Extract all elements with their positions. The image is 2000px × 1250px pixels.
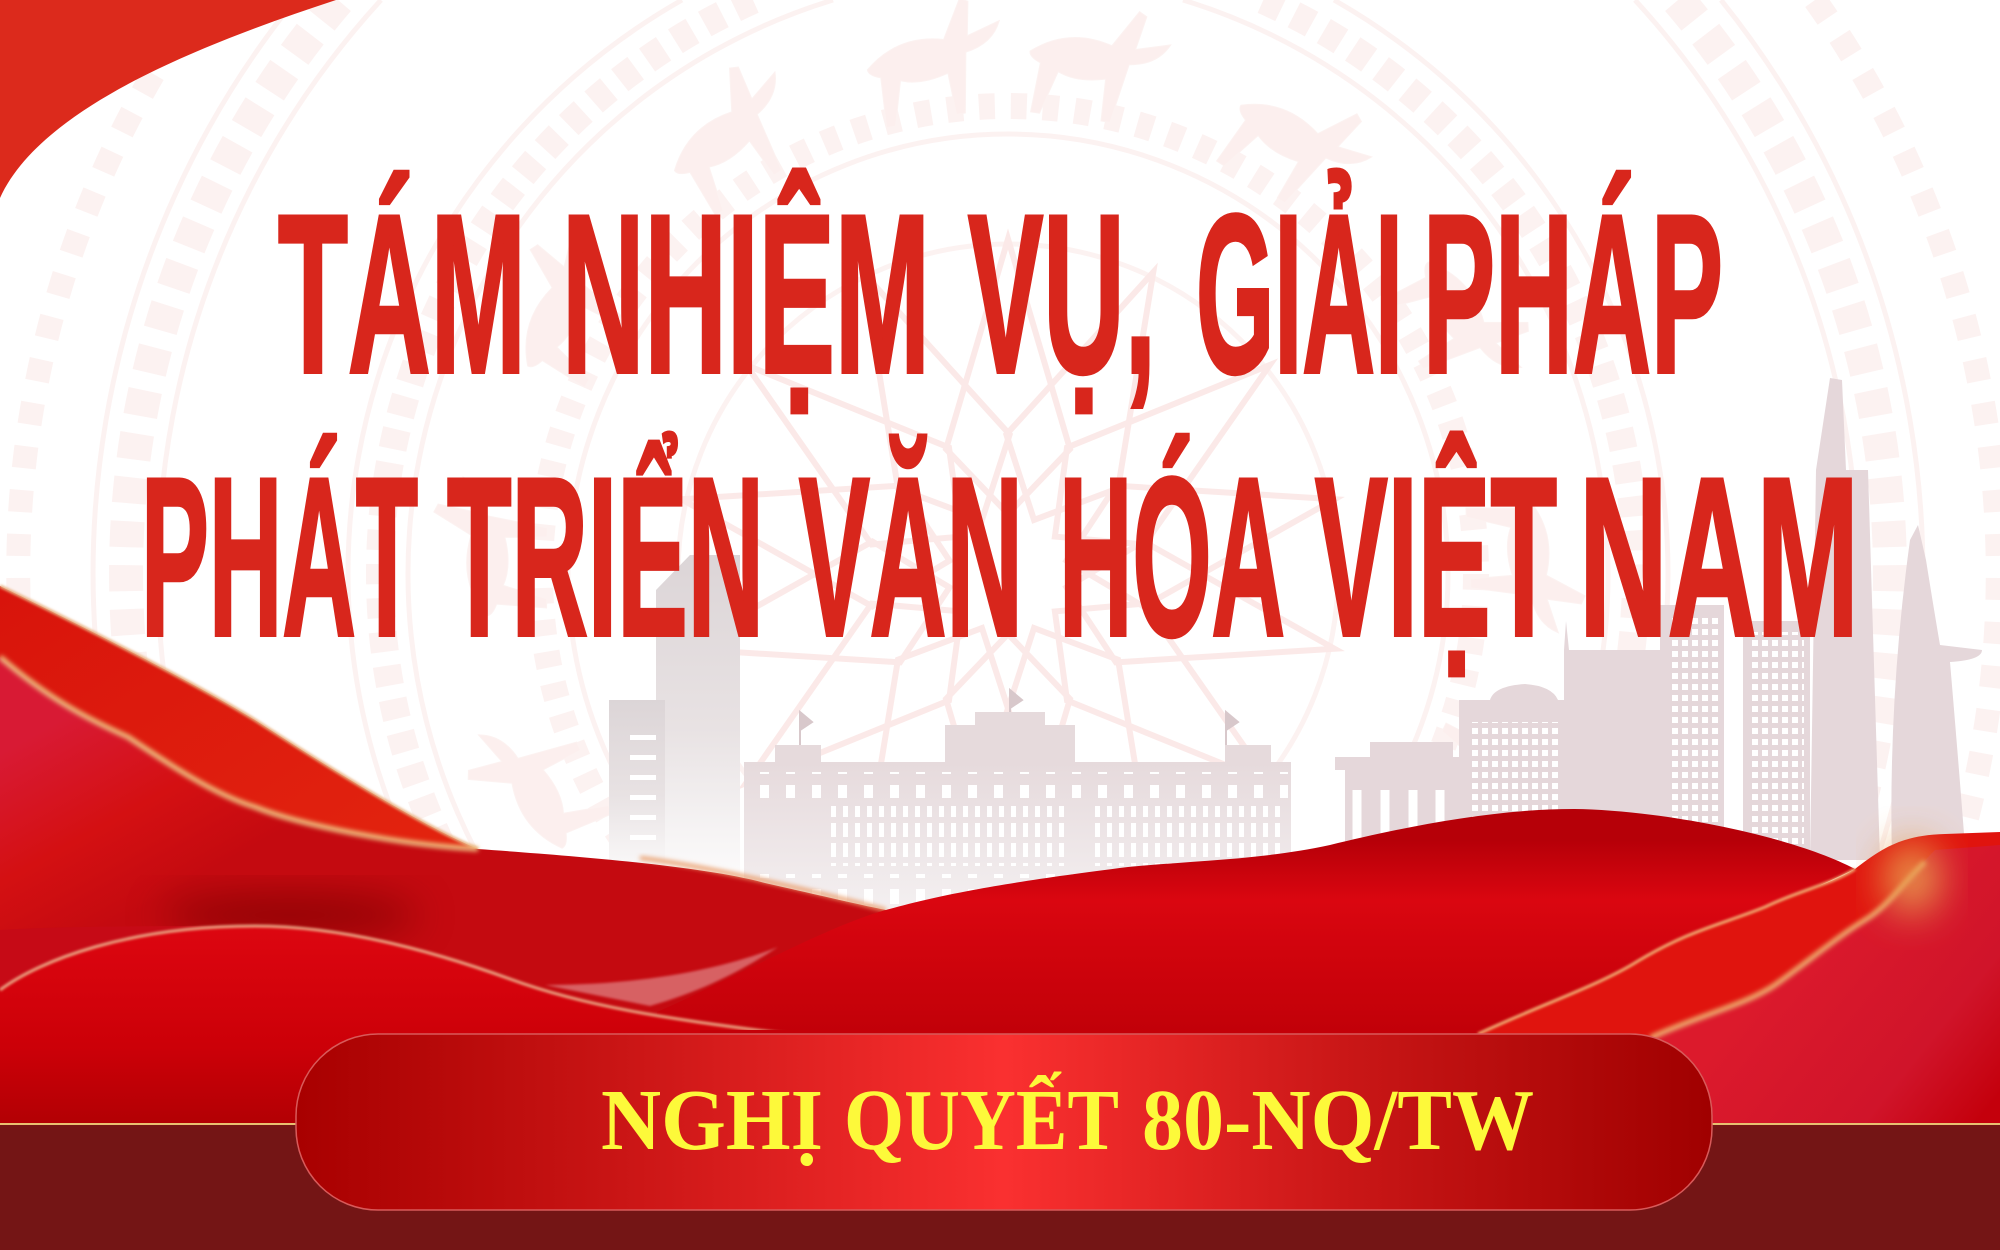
banner text	[601, 1071, 1534, 1168]
title: TÁM	[278, 167, 526, 420]
top-left red swoosh	[0, 0, 336, 198]
title: TRIỂN	[447, 430, 764, 683]
bottom dark band	[0, 1125, 2000, 1250]
banner text: NGHỊ	[601, 1071, 823, 1168]
title: VỤ,	[968, 167, 1156, 420]
ribbon: back left band	[0, 586, 478, 910]
gold divider line	[0, 1123, 2000, 1125]
ribbon: silver fold streak	[545, 947, 778, 1006]
ribbon: bottom middle fill	[700, 1030, 1700, 1125]
ribbon: right fold	[1478, 832, 2000, 1123]
title: VIỆT	[1315, 430, 1557, 683]
red silk ribbon	[0, 586, 2000, 1125]
title: PHÁT	[141, 430, 418, 683]
skyline: central palace	[744, 690, 1291, 912]
banner pill	[296, 1034, 1712, 1210]
title: NHIỆM	[562, 167, 930, 420]
ribbon: large right hump	[657, 809, 1855, 1045]
ribbon: crimson band	[0, 657, 886, 1045]
title: VĂN	[799, 430, 1023, 683]
skyline: right buildings and towers	[1335, 378, 1982, 870]
skyline: left towers	[609, 555, 740, 900]
title	[141, 167, 1859, 683]
title: GIẢI	[1196, 167, 1403, 420]
banner text: 80-NQ/TW	[1142, 1071, 1534, 1168]
ribbon: bottom left fold	[0, 926, 800, 1125]
title: HÓA	[1059, 430, 1285, 683]
ribbon: lower left strip	[0, 926, 255, 1000]
ribbon: golden glow	[1884, 842, 1940, 914]
banner text: QUYẾT	[844, 1071, 1119, 1168]
ribbon: right crimson panel	[1640, 845, 2000, 1123]
